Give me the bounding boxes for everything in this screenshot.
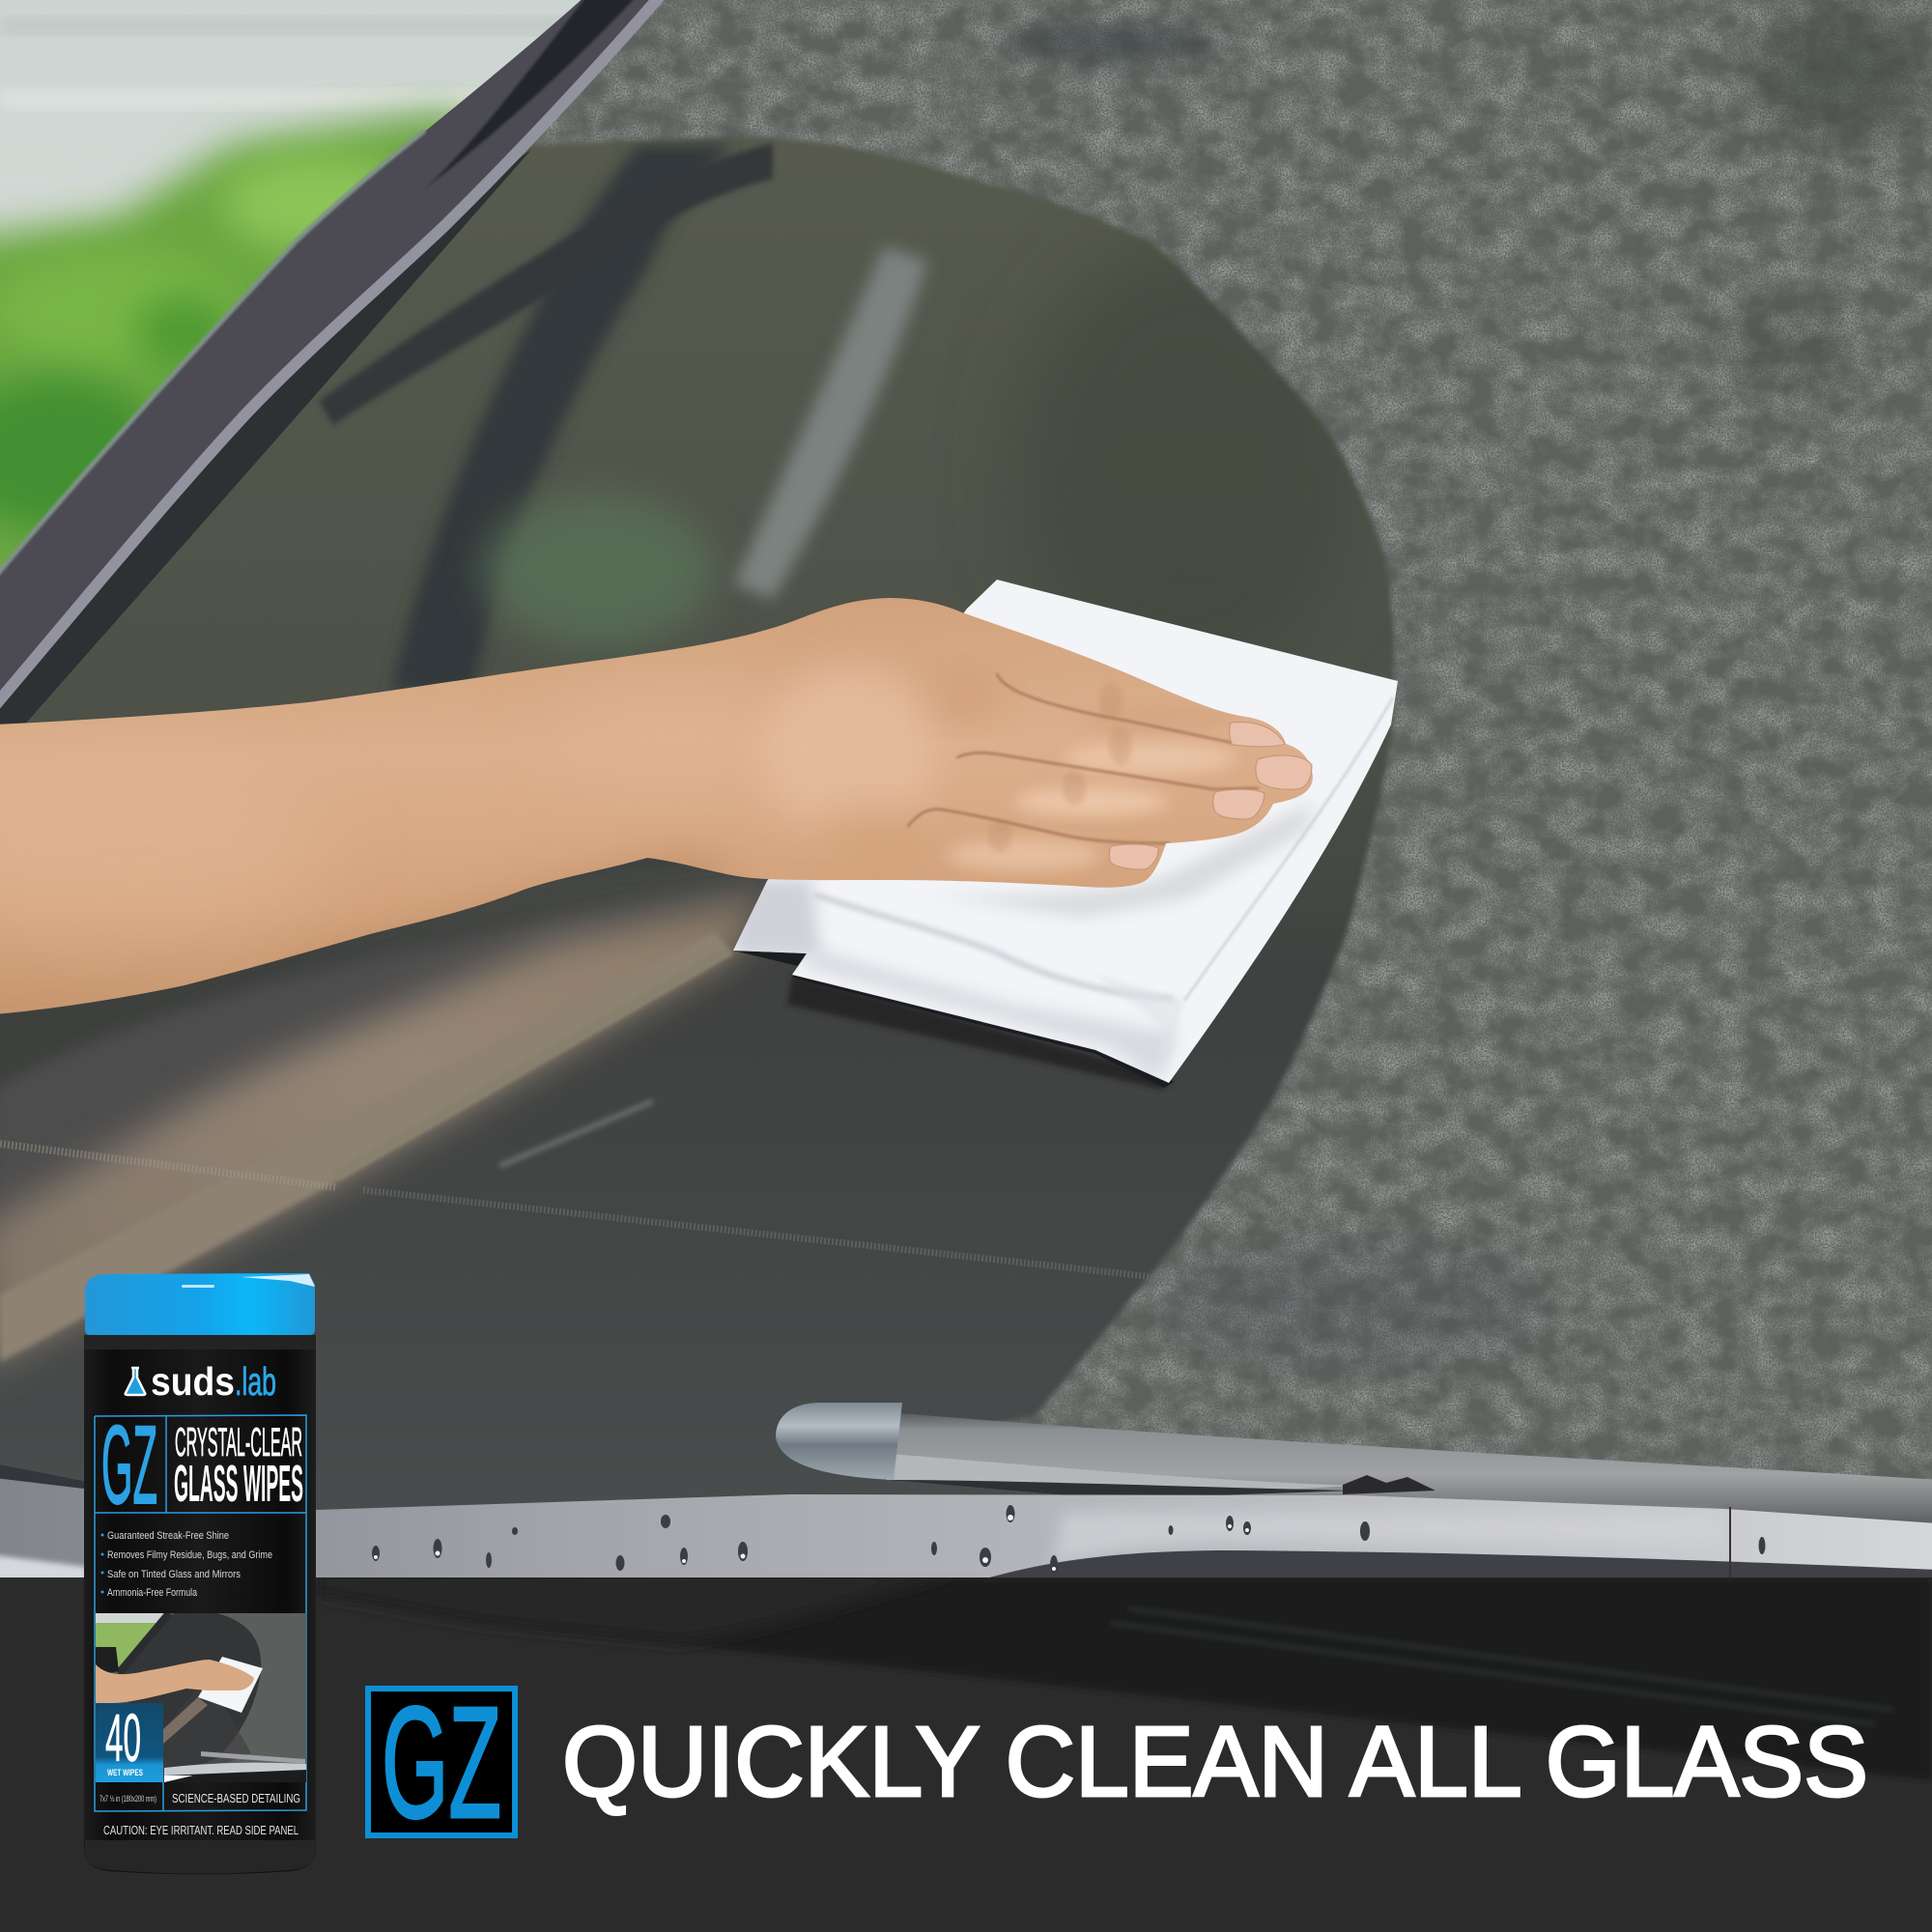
bottom dark band (0, 1577, 1932, 1780)
bottle cap (85, 1273, 315, 1335)
benefits list: Safe on Tinted Glass and Mirrors (107, 1569, 241, 1580)
bottle body (84, 1335, 316, 1874)
brand logo suds.lab: suds (151, 1359, 235, 1404)
benefits list: Removes Filmy Residue, Bugs, and Grime (107, 1549, 272, 1561)
wipe dimensions: 7x7 ⅛ in (180x200 mm) (99, 1794, 156, 1804)
label frame (95, 1415, 306, 1811)
infographic canvas: CRYSTAL-CLEAR (175, 1419, 302, 1464)
headline: QUICKLY CLEAN ALL GLASS (562, 1706, 1868, 1817)
wiper end cap (776, 1403, 902, 1480)
brand logo suds.lab (126, 1359, 276, 1404)
caution line: CAUTION: EYE IRRITANT. READ SIDE PANEL (103, 1823, 298, 1837)
car hood with water drops (0, 1463, 1932, 1584)
benefits list: Guaranteed Streak-Free Shine (107, 1530, 229, 1542)
wipes count: 40 (105, 1700, 141, 1776)
dirty glass with grime (531, 0, 1932, 1480)
infographic canvas: GLASS WIPES (174, 1455, 303, 1513)
ceramic mesh line on glass (0, 1144, 1154, 1277)
product bottle (84, 1273, 316, 1874)
wipes count: WET WIPES (107, 1768, 143, 1777)
clean glass area (0, 87, 1449, 1584)
brand logo suds.lab: .lab (235, 1359, 276, 1404)
benefits list: Ammonia-Free Formula (107, 1587, 198, 1599)
product bottle: GZ (101, 1404, 157, 1527)
label miniature photo (96, 1613, 306, 1787)
tagline on label: SCIENCE-BASED DETAILING (172, 1791, 300, 1805)
GZ badge: GZ (382, 1674, 501, 1851)
wipe cloth (733, 580, 1398, 1090)
window frame trim (0, 0, 661, 765)
blurred outdoor background (0, 0, 582, 570)
wipes count (105, 1700, 143, 1777)
fingernails (1109, 723, 1312, 869)
GZ badge (368, 1674, 515, 1851)
wiper blade (776, 1403, 1932, 1536)
finger gaps (908, 674, 1258, 843)
benefits list (100, 1530, 272, 1599)
arm and hand (0, 598, 1313, 1024)
product title (174, 1419, 303, 1513)
